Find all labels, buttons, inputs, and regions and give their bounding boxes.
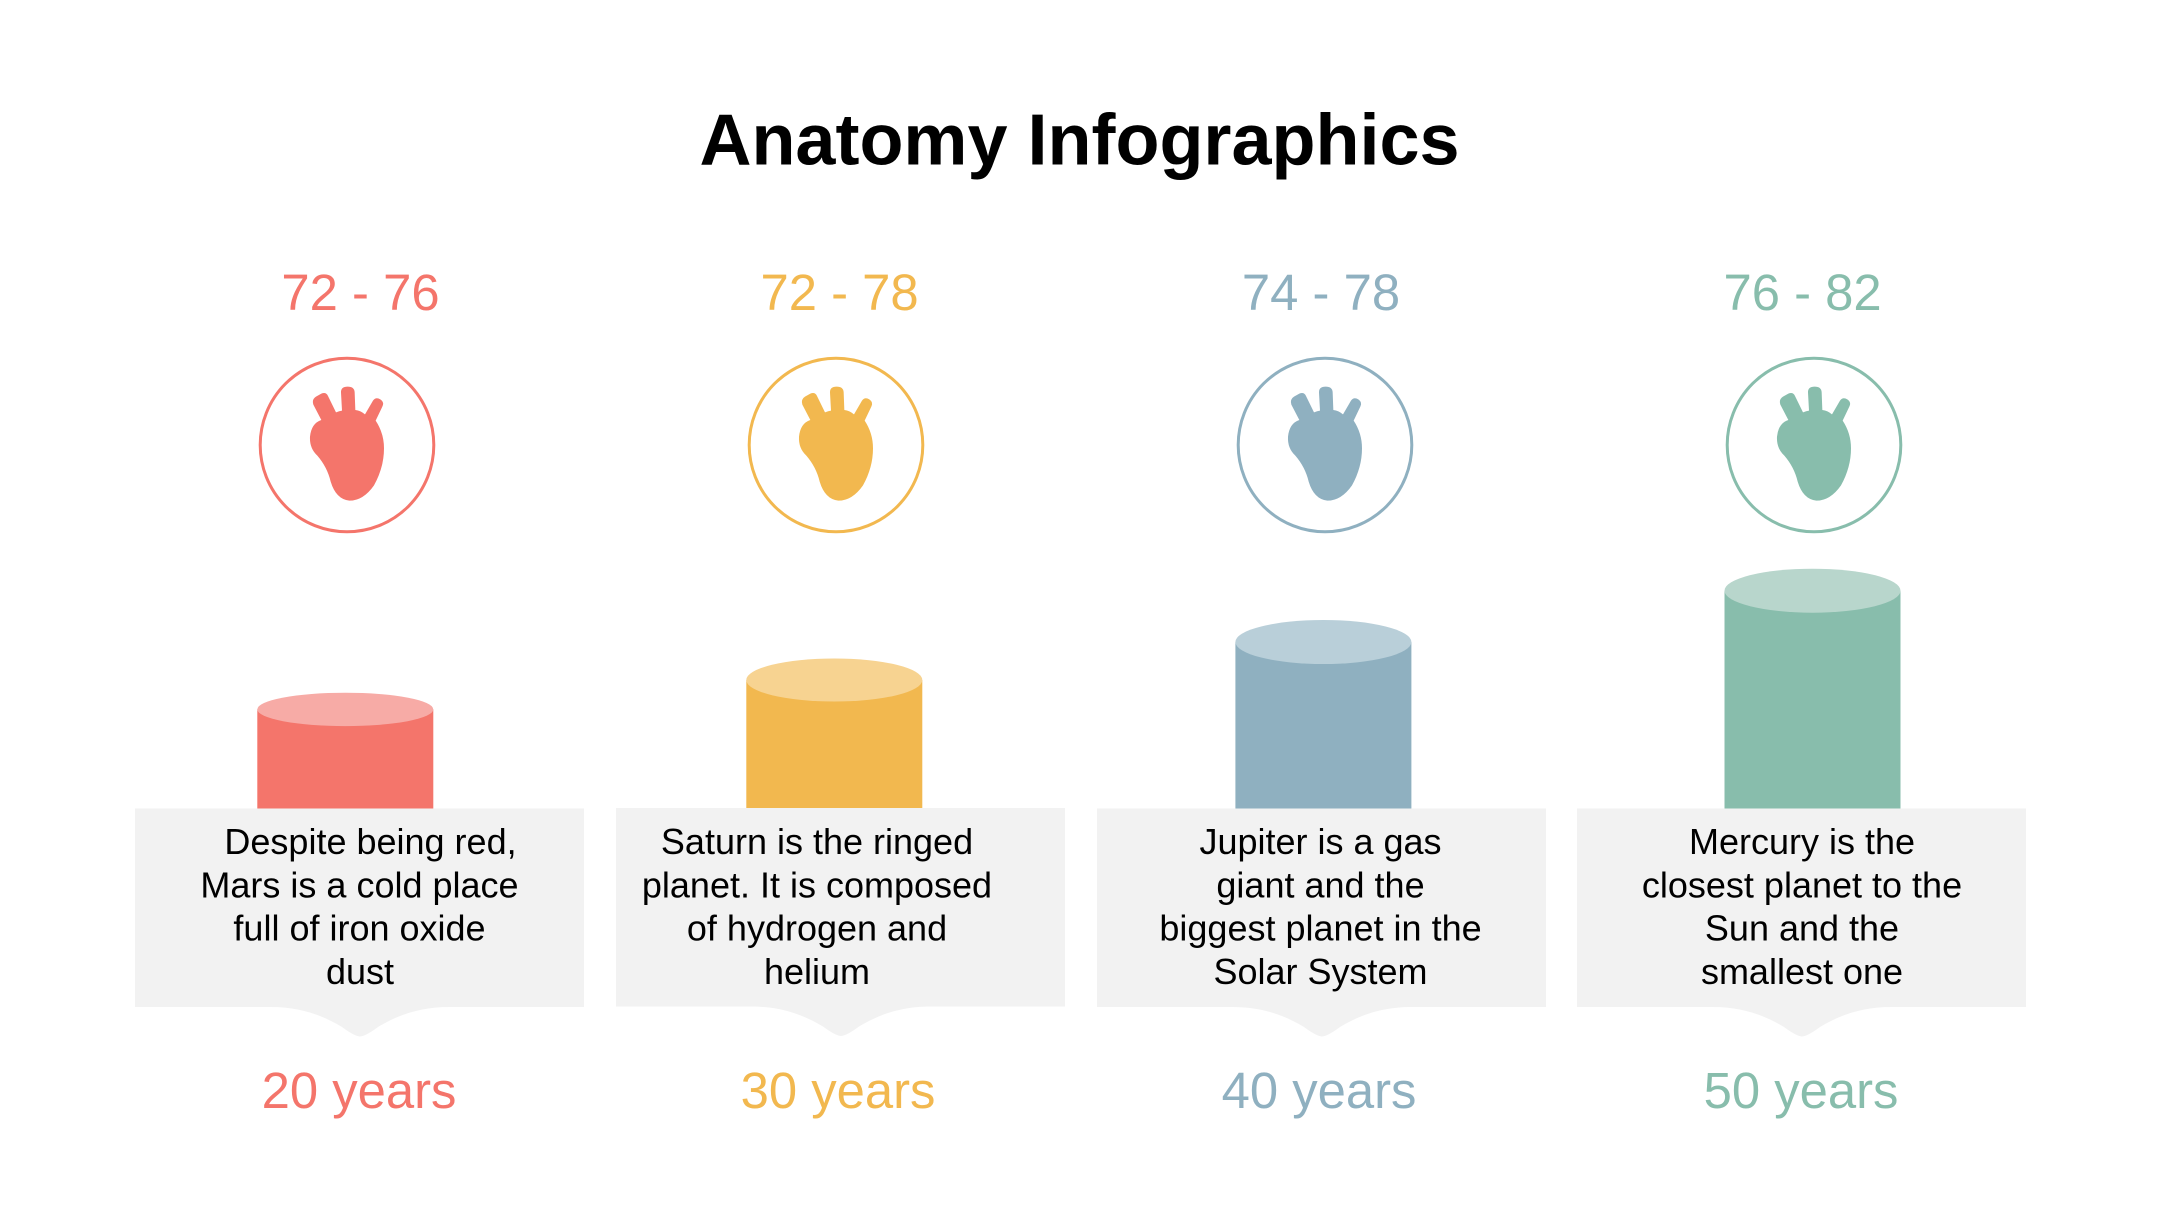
description: Despite being red, <box>224 821 517 862</box>
description: Mercury is the <box>1689 821 1915 862</box>
range label: 76 - 82 <box>1724 264 1882 321</box>
description: Sun and the <box>1705 908 1899 949</box>
description: giant and the <box>1216 864 1425 905</box>
text callout panel <box>616 808 1065 1036</box>
description: of hydrogen and <box>687 908 947 949</box>
description: Solar System <box>1213 951 1428 992</box>
icon: heart in circle <box>1238 358 1412 532</box>
range label: 74 - 78 <box>1242 264 1400 321</box>
icon: heart in circle <box>260 358 434 532</box>
description: Mars is a cold place <box>200 864 519 905</box>
column: Mars <box>135 264 584 1119</box>
description: dust <box>326 951 394 992</box>
description: biggest planet in the <box>1159 908 1482 949</box>
cylinder bar <box>1235 620 1411 809</box>
column: Mercury <box>1577 264 2026 1119</box>
description: full of iron oxide <box>233 908 486 949</box>
icon: heart in circle <box>749 358 923 532</box>
duration label: 30 years <box>741 1062 935 1119</box>
description: smallest one <box>1701 951 1903 992</box>
cylinder bar <box>257 693 433 809</box>
duration label: 20 years <box>262 1062 456 1119</box>
cylinder bar <box>1724 569 1900 809</box>
cylinder bar <box>746 658 922 809</box>
text callout panel <box>135 808 584 1036</box>
description: closest planet to the <box>1642 864 1962 905</box>
description: helium <box>764 951 870 992</box>
description: Jupiter is a gas <box>1199 821 1442 862</box>
range label: 72 - 78 <box>761 264 919 321</box>
text callout panel <box>1097 808 1546 1036</box>
range label: 72 - 76 <box>281 264 440 321</box>
title: Anatomy Infographics <box>699 100 1460 180</box>
duration label: 50 years <box>1704 1062 1898 1119</box>
description: Saturn is the ringed <box>661 821 973 862</box>
icon: heart in circle <box>1727 358 1901 532</box>
column: Jupiter <box>1097 264 1546 1119</box>
description: planet. It is composed <box>642 864 992 905</box>
duration label: 40 years <box>1222 1062 1416 1119</box>
column: Saturn <box>616 264 1065 1119</box>
text callout panel <box>1577 808 2026 1036</box>
